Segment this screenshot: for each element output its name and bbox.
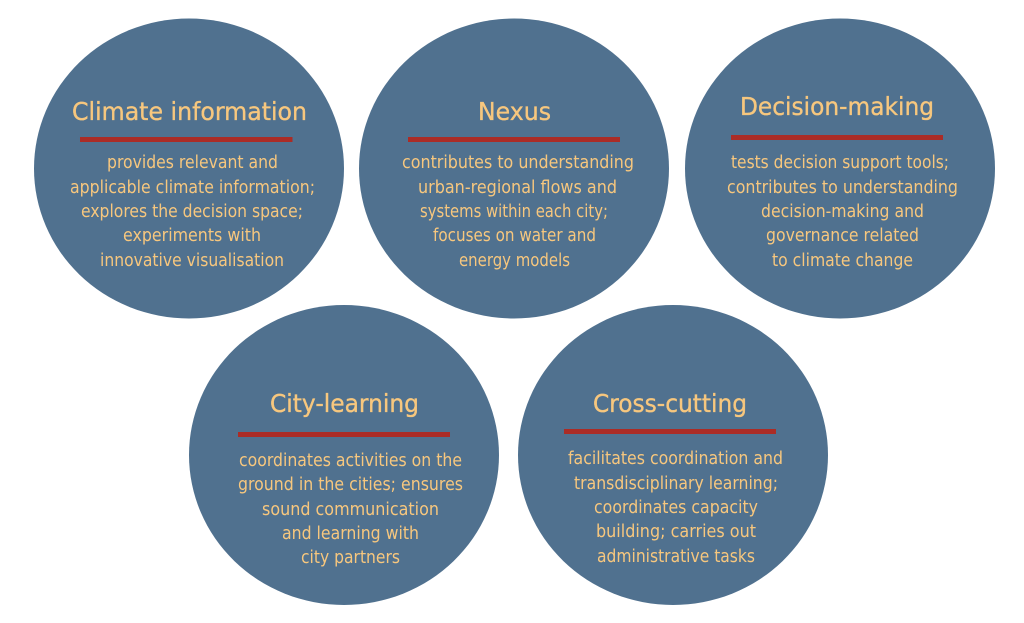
text block: Nexus [402, 153, 634, 271]
text block: City-learning [238, 451, 463, 568]
text block: Decision-making [727, 153, 958, 271]
heading: Climate information: Climate information [72, 97, 307, 126]
divider: Cross-cutting [564, 429, 776, 434]
heading: Nexus: Nexus [478, 97, 551, 126]
text block: Decision-making: governance related [766, 226, 919, 246]
text block: Climate information: explores the decision space; [81, 202, 303, 222]
text block: Nexus: urban-regional flows and [418, 178, 617, 198]
panel: City-learning [189, 305, 499, 605]
text block: Nexus: focuses on water and [433, 226, 596, 246]
text block: Cross-cutting: building; carries out [596, 522, 756, 542]
heading: Decision-making: Decision-making [740, 92, 934, 121]
panel: Nexus [359, 18, 669, 318]
text block: Decision-making: decision-making and [761, 202, 924, 222]
text block: Cross-cutting [568, 449, 783, 567]
text block: Climate information: innovative visualisation [100, 251, 284, 271]
text block: City-learning: ground in the cities; ensures [238, 475, 463, 495]
text block: Climate information: provides relevant and [107, 153, 278, 173]
divider: Climate information [80, 137, 292, 142]
text block: Decision-making: contributes to understanding [727, 178, 958, 198]
panel: Cross-cutting [518, 305, 828, 605]
text block: Climate information [70, 153, 315, 271]
text block: Cross-cutting: coordinates capacity [594, 498, 758, 518]
text block: City-learning: coordinates activities on the [239, 451, 462, 471]
divider: Nexus [408, 137, 620, 142]
text block: Cross-cutting: transdisciplinary learning; [574, 474, 778, 494]
panel: Climate information [34, 18, 344, 318]
text block: Climate information: experiments with [123, 226, 261, 246]
panel: Decision-making [685, 18, 995, 318]
text block: Decision-making: tests decision support tools; [731, 153, 949, 173]
text block: Climate information: applicable climate information; [70, 178, 315, 198]
heading: City-learning: City-learning [270, 389, 419, 418]
divider: Decision-making [731, 135, 943, 140]
text block: Cross-cutting: facilitates coordination and [568, 449, 783, 469]
text block: City-learning: sound communication [262, 500, 439, 520]
text block: Nexus: systems within each city; [420, 202, 608, 222]
divider: City-learning [238, 432, 450, 437]
text block: Nexus: energy models [459, 251, 570, 271]
text block: Nexus: contributes to understanding [402, 153, 634, 173]
text block: City-learning: and learning with [282, 524, 419, 544]
text block: Decision-making: to climate change [772, 251, 913, 271]
heading: Cross-cutting: Cross-cutting [593, 389, 747, 418]
text block: Cross-cutting: administrative tasks [597, 547, 755, 567]
text block: City-learning: city partners [301, 548, 400, 568]
